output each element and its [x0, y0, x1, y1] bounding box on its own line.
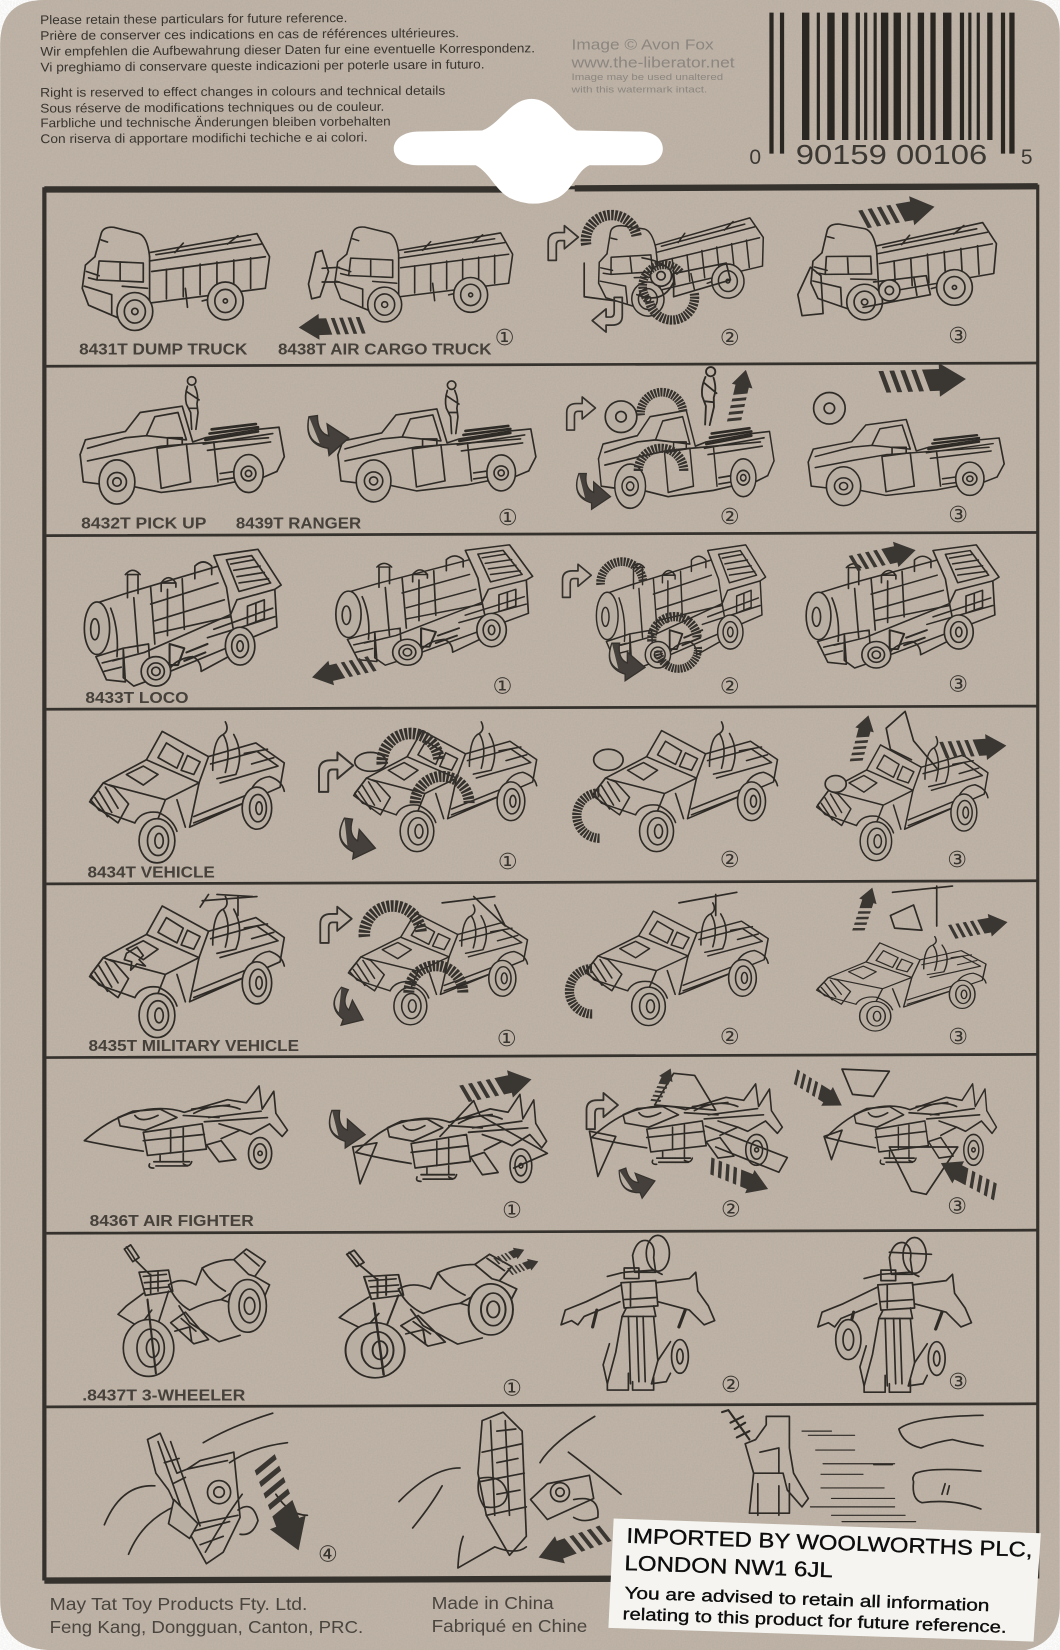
text block: retention notice [40, 10, 535, 75]
barcode: 5 [1021, 146, 1033, 169]
row 7 step numbers [502, 1369, 968, 1400]
row 7 step numbers: ② [721, 1372, 741, 1397]
row 1: dump truck panel [82, 192, 1000, 340]
row 4 step numbers: ③ [947, 847, 967, 872]
row 5 step numbers [497, 1024, 968, 1051]
row 1 label: air cargo truck: 8438T AIR CARGO TRUCK [278, 342, 492, 359]
row 8: flicked robot launch [722, 1410, 983, 1522]
row 2 step numbers [498, 502, 968, 530]
text block: retention notice: Wir empfehlen die Aufbewahrung dieser Daten fur eine eventuelle Korrespondenz. [40, 41, 535, 59]
barcode [749, 13, 1033, 170]
step number 4: ④ [318, 1542, 338, 1568]
footer: country of origin: Made in China [432, 1593, 554, 1613]
row 5 step numbers: ① [497, 1026, 517, 1051]
text block: retention notice: Vi preghiamo di conservare queste indicazioni per poterle usare in futuro. [40, 57, 485, 75]
row 3 step numbers: ② [720, 673, 740, 698]
row 2 step numbers: ③ [948, 502, 968, 527]
text block: technical changes notice: Con riserva di apportare modifichi techiche e ai colori. [40, 130, 368, 146]
row 1 step numbers: ① [495, 325, 515, 350]
footer: country of origin [432, 1593, 587, 1636]
footer: manufacturer address [50, 1594, 363, 1637]
row 2 label: pick up: 8432T PICK UP [81, 515, 206, 532]
row 1 label: dump truck: 8431T DUMP TRUCK [79, 342, 248, 359]
row 7 step numbers: ③ [948, 1369, 968, 1394]
watermark: Image © Avon Fox [572, 37, 714, 53]
instruction frame with row dividers [44, 186, 1038, 1581]
text block: technical changes notice: Farbliche und technische Änderungen bleiben vorbehalten [40, 114, 391, 130]
row 1 step numbers: ② [720, 325, 740, 350]
row 5 step numbers: ② [720, 1024, 740, 1049]
barcode: 0 [749, 146, 761, 169]
row 2 label: ranger: 8439T RANGER [236, 515, 362, 532]
sticker: importer label: LONDON NW1 6JL [624, 1552, 833, 1582]
row 7: 3-wheeler panel [118, 1235, 971, 1392]
sticker: importer label [608, 1518, 1041, 1642]
sticker: importer label: relating to this product for future reference. [622, 1604, 1007, 1637]
watermark [570, 37, 735, 96]
row 3 step numbers [493, 671, 968, 698]
row 3 step numbers: ③ [948, 671, 968, 696]
text block: retention notice: Prière de conserver ces indications en cas de références ultérieures. [40, 26, 459, 43]
row 6 step numbers: ③ [947, 1193, 967, 1218]
row 5 step numbers: ③ [948, 1024, 968, 1049]
row 5 label: military vehicle: 8435T MILITARY VEHICLE [89, 1038, 299, 1055]
arrow: pull left [534, 1519, 613, 1571]
row 6 step numbers: ② [721, 1196, 741, 1221]
row 8: hand operation separating [399, 1412, 621, 1568]
footer: country of origin: Fabriqué en Chine [432, 1616, 587, 1636]
row 1 step numbers: ③ [948, 323, 968, 348]
sticker: importer label: IMPORTED BY WOOLWORTHS PLC, [626, 1525, 1033, 1562]
row 6: air fighter panel [84, 1065, 1004, 1204]
row 1 step numbers [495, 323, 968, 350]
watermark: Image may be used unaltered [572, 72, 723, 83]
row 2: pick up panel [80, 362, 1004, 509]
row 7 label: 3-wheeler: .8437T 3-WHEELER [82, 1388, 246, 1405]
row 4 step numbers [498, 847, 967, 874]
row 6 step numbers: ① [502, 1198, 522, 1223]
footer: manufacturer address: May Tat Toy Products Fty. Ltd. [50, 1594, 307, 1614]
text block: technical changes notice: Sous réserve de modifications techniques ou de couleur. [40, 100, 384, 116]
text block: retention notice: Please retain these particulars for future reference. [40, 11, 347, 27]
row 7 step numbers: ① [502, 1375, 522, 1400]
footer: manufacturer address: Feng Kang, Dongguan, Canton, PRC. [50, 1617, 363, 1637]
row 4 step numbers: ① [498, 849, 518, 874]
hang hole cutout [394, 99, 663, 204]
row 5: military vehicle panel [90, 885, 1010, 1038]
row 3 label: loco: 8433T LOCO [85, 690, 189, 707]
sticker: importer label: You are advised to retain all information [624, 1583, 990, 1615]
row 4 label: vehicle: 8434T VEHICLE [88, 865, 215, 882]
row 6 step numbers [502, 1193, 967, 1223]
row 3: loco panel [84, 537, 999, 690]
arrow: push down [245, 1452, 316, 1557]
watermark: www.the-liberator.net [570, 55, 735, 71]
row 2 step numbers: ① [498, 505, 518, 530]
row 2 step numbers: ② [720, 504, 740, 529]
watermark: with this watermark intact. [570, 85, 707, 96]
barcode: 90159 00106 [796, 139, 987, 170]
row 4: vehicle panel [90, 711, 1007, 863]
row 3 step numbers: ① [493, 673, 512, 698]
text block: technical changes notice: Right is reserved to effect changes in colours and technical details [40, 84, 445, 100]
row 4 step numbers: ② [720, 847, 740, 872]
row 8: hand operation step 4 [104, 1413, 307, 1564]
text block: technical changes notice [40, 84, 446, 146]
row 6 label: air fighter: 8436T AIR FIGHTER [90, 1213, 254, 1230]
